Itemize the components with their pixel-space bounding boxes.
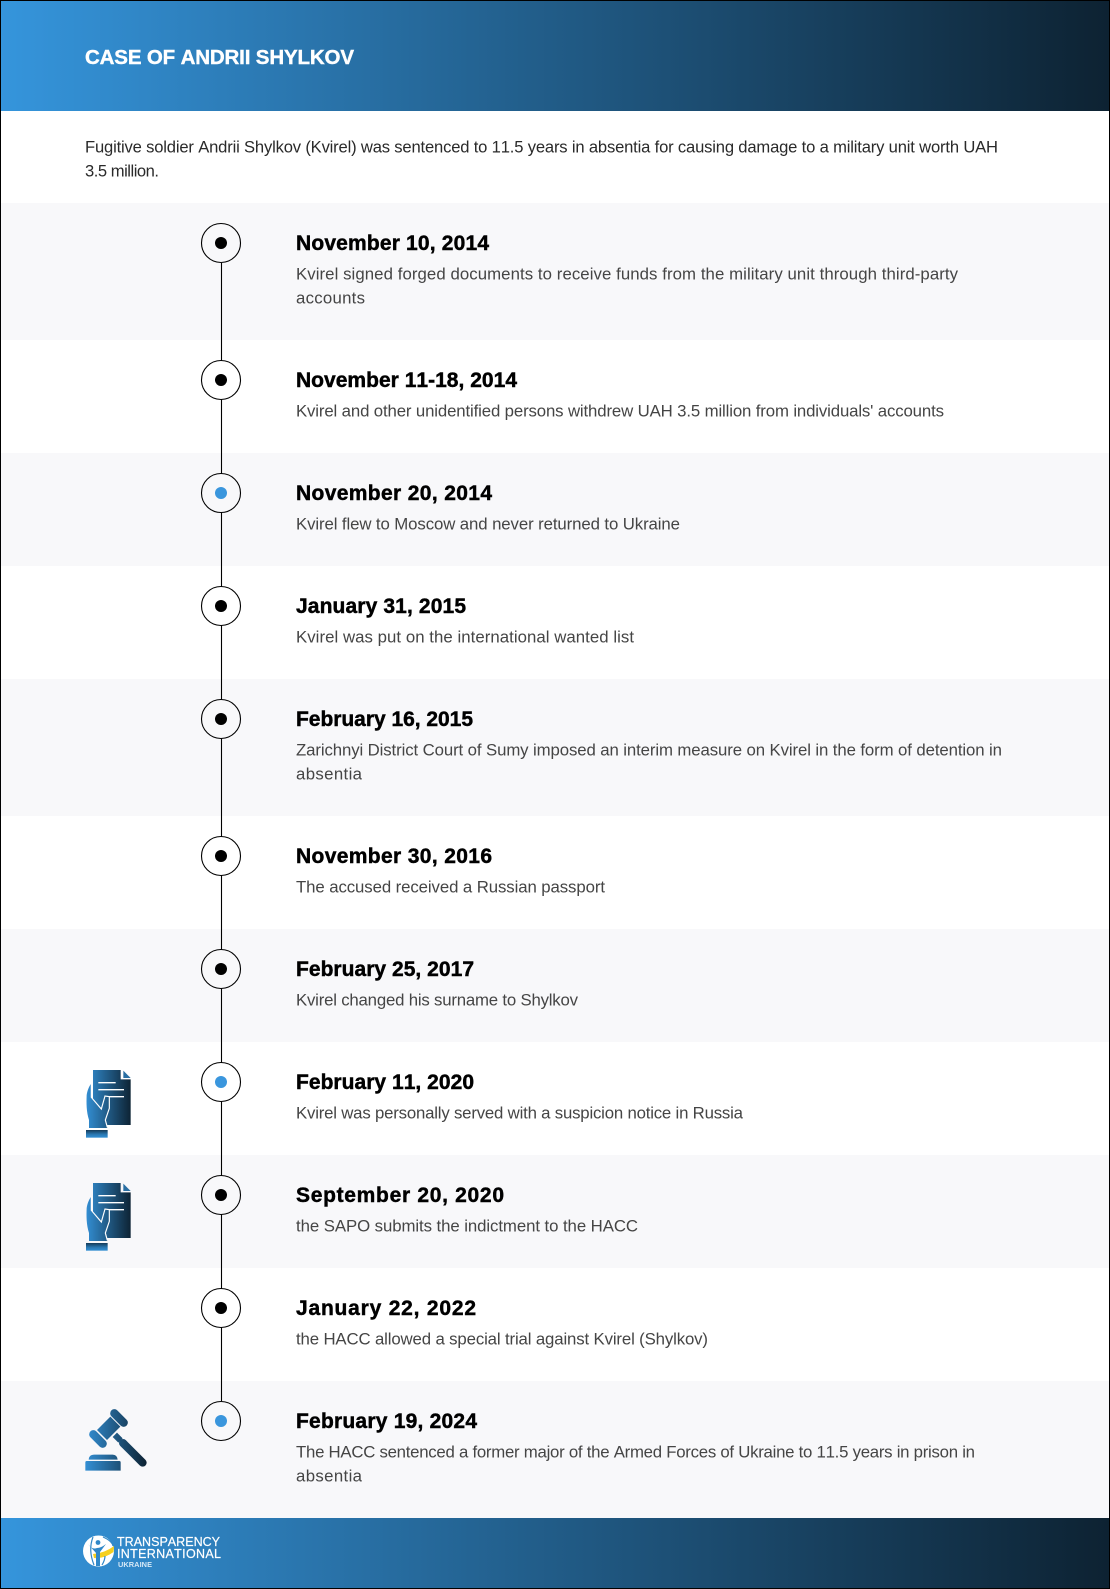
marker: November 20, 2014 <box>202 474 240 512</box>
intro text: Fugitive soldier Andrii Shylkov (Kvirel) was sentenced to 11.5 years in absentia for causing damage to a military unit worth UAH <box>85 138 998 156</box>
row: February 16, 2015: Zarichnyi District Court of Sumy imposed an interim measure on Kvirel in the form of detention in <box>296 740 1002 760</box>
row: February 25, 2017: February 25, 2017 <box>296 958 474 981</box>
header banner <box>0 0 1110 111</box>
marker: February 16, 2015 <box>202 700 240 738</box>
row: September 20, 2020 <box>0 1155 1110 1268</box>
marker: February 11, 2020 <box>202 1062 240 1102</box>
icon: hand holding document, September 2020 <box>86 1183 131 1251</box>
row: November 30, 2016 <box>0 816 1110 929</box>
row: February 11, 2020: Kvirel was personally served with a suspicion notice in Russia <box>296 1104 744 1122</box>
row: September 20, 2020: September 20, 2020 <box>296 1184 504 1207</box>
row: February 11, 2020: February 11, 2020 <box>296 1071 474 1094</box>
row: November 20, 2014 <box>0 453 1110 566</box>
row: September 20, 2020: the SAPO submits the indictment to the HACC <box>296 1216 638 1236</box>
logo: Transparency International Ukraine: INTERNATIONAL <box>117 1547 221 1561</box>
row: November 11-18, 2014 <box>0 340 1110 453</box>
logo: Transparency International Ukraine: TRANSPARENCY <box>117 1535 221 1549</box>
icon: hand holding document, February 2020 <box>86 1070 131 1138</box>
row: February 16, 2015 <box>0 679 1110 816</box>
marker: November 30, 2016 <box>202 836 240 876</box>
marker: February 19, 2024 <box>202 1402 240 1440</box>
row: January 22, 2022: the HACC allowed a special trial against Kvirel (Shylkov) <box>296 1330 708 1348</box>
row: January 31, 2015: January 31, 2015 <box>296 595 466 618</box>
title: CASE OF ANDRII SHYLKOV <box>85 46 354 69</box>
row: February 25, 2017: Kvirel changed his surname to Shylkov <box>296 990 579 1010</box>
row: November 20, 2014: Kvirel flew to Moscow and never returned to Ukraine <box>296 514 680 534</box>
row: November 30, 2016: November 30, 2016 <box>296 845 492 868</box>
row: January 22, 2022 <box>0 1268 1110 1381</box>
logo: Transparency International Ukraine <box>83 1535 221 1569</box>
row: February 11, 2020 <box>0 1042 1110 1155</box>
marker: January 22, 2022 <box>202 1288 240 1328</box>
row: November 10, 2014: accounts <box>296 288 365 308</box>
row: January 31, 2015: Kvirel was put on the international wanted list <box>296 628 634 646</box>
row: February 19, 2024 <box>0 1381 1110 1518</box>
row: November 20, 2014: November 20, 2014 <box>296 482 492 505</box>
row: January 31, 2015 <box>0 566 1110 679</box>
logo: Transparency International Ukraine: UKRAINE <box>118 1560 152 1569</box>
row: February 25, 2017 <box>0 929 1110 1042</box>
row: January 22, 2022: January 22, 2022 <box>296 1297 476 1320</box>
row: November 10, 2014: November 10, 2014 <box>296 232 489 255</box>
marker: January 31, 2015 <box>202 586 240 626</box>
row: November 11-18, 2014: November 11-18, 2014 <box>296 369 517 392</box>
footer banner <box>0 1518 1110 1589</box>
row: February 19, 2024: February 19, 2024 <box>296 1410 477 1433</box>
row: November 11-18, 2014: Kvirel and other unidentified persons withdrew UAH 3.5 million from individuals' accounts <box>296 402 944 420</box>
timeline <box>202 224 240 1440</box>
intro text <box>85 138 998 180</box>
marker: February 25, 2017 <box>202 950 240 988</box>
marker: November 10, 2014 <box>202 224 240 262</box>
row: February 19, 2024: The HACC sentenced a former major of the Armed Forces of Ukraine to 11.5 years in prison in <box>296 1442 975 1462</box>
row: November 30, 2016: The accused received a Russian passport <box>296 878 605 896</box>
row: February 16, 2015: February 16, 2015 <box>296 708 473 731</box>
marker: November 11-18, 2014 <box>202 360 240 400</box>
row: November 10, 2014 <box>0 203 1110 340</box>
icon: gavel <box>85 1413 143 1471</box>
marker: September 20, 2020 <box>202 1176 240 1214</box>
logo emblem <box>83 1536 114 1566</box>
intro text: 3.5 million. <box>85 162 159 180</box>
row: February 19, 2024: absentia <box>296 1466 363 1486</box>
row: November 10, 2014: Kvirel signed forged documents to receive funds from the military unit through third-party <box>296 264 959 284</box>
row: February 16, 2015: absentia <box>296 764 363 784</box>
